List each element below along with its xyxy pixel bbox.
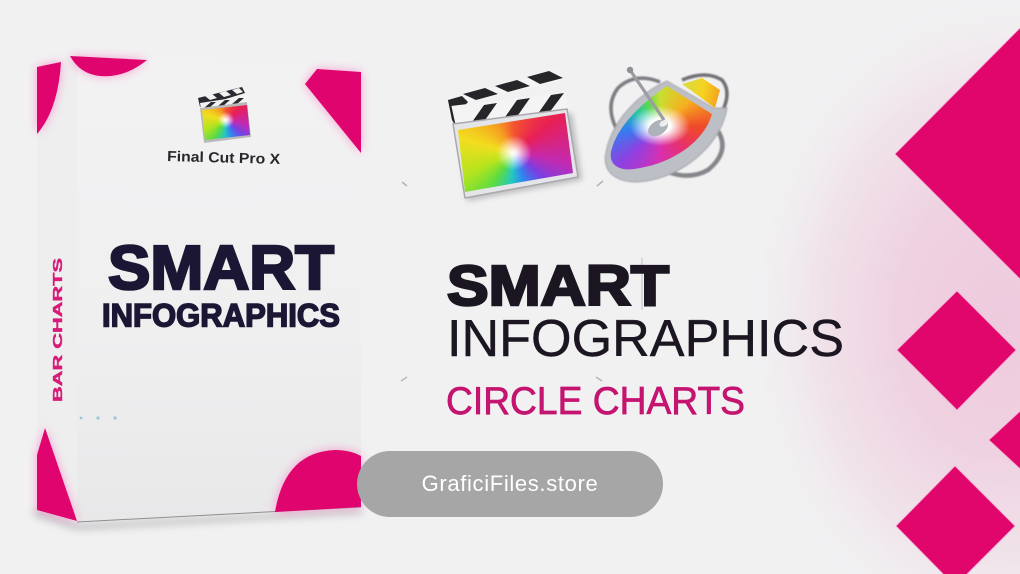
box side label: BAR CHARTS [50, 257, 65, 402]
small edge diamond [989, 402, 1020, 478]
corner glows [37, 56, 361, 521]
clapper frame [453, 109, 578, 198]
middle diamond [897, 291, 1016, 410]
heading: infographics: INFOGRAPHICS [447, 310, 844, 368]
motion icon colour disc [610, 86, 712, 170]
clapper stick [448, 70, 563, 106]
box ground shadow [34, 508, 362, 530]
large diamond [895, 18, 1020, 289]
box title: SMART [108, 234, 334, 303]
subheading: circle charts: CIRCLE CHARTS [446, 380, 745, 423]
bottom diamond [896, 466, 1015, 574]
clapper shadow [460, 113, 582, 201]
box side face [37, 56, 77, 522]
box app label: Final Cut Pro X [167, 149, 281, 168]
small spectrum panel [202, 105, 250, 140]
box title [102, 234, 340, 334]
box corner shapes [37, 56, 361, 521]
watermark pill [357, 451, 663, 517]
loading dots [80, 416, 117, 420]
small clapper icon [198, 87, 251, 143]
watermark pill: GraficiFiles.store [422, 471, 598, 496]
box title: INFOGRAPHICS [102, 298, 340, 334]
large spectrum panel [456, 112, 574, 194]
motion icon rear wedge [682, 78, 720, 108]
clapper lower band [451, 92, 567, 127]
heading: smart: SMART [447, 254, 669, 318]
box front face [70, 56, 361, 522]
